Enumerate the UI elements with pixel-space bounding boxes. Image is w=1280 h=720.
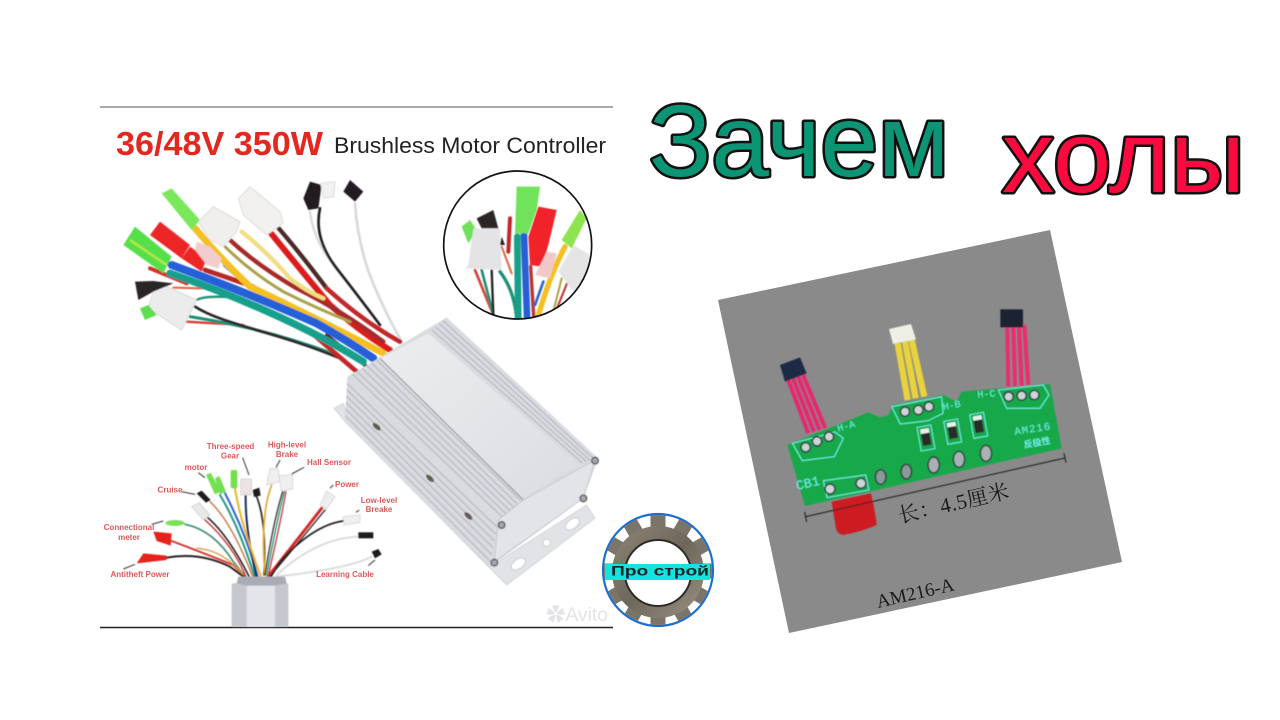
diagram labels: Connectional	[104, 523, 154, 532]
ridge lines	[345, 321, 594, 562]
diagram labels: Gear	[221, 452, 239, 460]
label leader lines	[123, 458, 375, 569]
PCB labels: AM216	[1014, 421, 1052, 439]
front end face	[494, 460, 595, 562]
badge ellipse	[603, 514, 713, 626]
PCB labels: H-A	[836, 419, 856, 435]
red capacitor	[832, 493, 877, 535]
PCB labels: H-C	[977, 388, 996, 401]
sensor B ribbon	[898, 340, 924, 400]
solder points	[801, 390, 1039, 494]
close-up red connector	[528, 207, 557, 267]
title: second word: холы	[1002, 100, 1245, 214]
gear	[604, 515, 712, 625]
red bullet connector	[150, 222, 207, 272]
black plug	[303, 182, 322, 210]
board artwork	[780, 309, 1066, 535]
close-up green connector	[515, 187, 540, 233]
diagram labels: motor	[185, 463, 207, 472]
bottom rule	[100, 626, 613, 628]
cyan band	[605, 564, 710, 580]
PCB labels: 反极性	[1023, 434, 1051, 450]
dimension line	[805, 453, 1066, 522]
mounting flange	[334, 403, 595, 585]
large white connector	[238, 187, 283, 235]
sensor B white head	[889, 324, 916, 344]
panel: controller product photo	[100, 107, 613, 628]
main wires	[170, 218, 400, 362]
panel: hall sensor board photo	[718, 230, 1122, 633]
box body	[345, 317, 598, 567]
bolts	[491, 457, 598, 566]
diagram labels	[104, 440, 397, 579]
close-up contents	[462, 187, 590, 325]
title: first word: Зачем	[649, 84, 949, 198]
small green tab	[140, 305, 157, 320]
twin green spade connectors	[123, 227, 172, 273]
mini controller block	[232, 577, 288, 627]
product name heading: Brushless Motor Controller	[334, 133, 607, 158]
dimension label: 长：4.5厘米	[896, 479, 1011, 528]
diagram labels: Low-level	[361, 496, 397, 505]
diagram wires	[167, 485, 372, 579]
diagram artwork	[123, 458, 382, 627]
inset circle border	[444, 171, 592, 319]
sensor C body	[1000, 309, 1023, 327]
sensor wires	[310, 203, 400, 338]
voltage and power heading: 36/48V 350W	[116, 125, 324, 162]
diagram labels: Learning Cable	[316, 570, 374, 579]
gear ring	[612, 526, 704, 618]
close-up right green connector	[562, 210, 587, 248]
model label: AM216-A	[874, 575, 957, 613]
diagram labels: Cruise	[158, 486, 183, 494]
close-up small green tab	[462, 220, 477, 243]
diagram labels: meter	[118, 533, 140, 542]
pink tag	[195, 242, 222, 268]
close-up right white connector	[558, 245, 590, 292]
gear teeth	[604, 515, 712, 625]
PCB labels	[795, 388, 1052, 495]
diagram labels: Antitheft Power	[110, 570, 170, 579]
small white plug	[321, 182, 335, 198]
resistors	[917, 412, 988, 451]
close-up white connector	[465, 228, 502, 270]
close-up pink tag	[535, 252, 557, 278]
sensor A body	[780, 357, 807, 382]
lower white connector	[148, 285, 197, 330]
top rule	[100, 106, 613, 108]
logo text: Про строй	[611, 562, 709, 578]
diagram labels: Breake	[366, 505, 393, 514]
diagram labels: High-level	[268, 440, 306, 450]
diagram labels: Hall Sensor	[307, 458, 351, 467]
gear hole	[625, 540, 691, 606]
wire harness	[123, 180, 400, 372]
wiring diagram	[104, 440, 397, 627]
diagram labels: Brake	[276, 450, 299, 459]
lower thin wires	[150, 268, 367, 372]
flat top panel	[380, 333, 578, 498]
black plug right	[343, 180, 363, 202]
lower black plug	[135, 281, 173, 300]
green PCB	[787, 384, 1062, 506]
PCB silkscreen pads	[792, 432, 843, 461]
inset circle: connector close-up	[444, 171, 592, 325]
diagram connectors	[137, 468, 382, 563]
PCB labels: H-B	[942, 399, 962, 413]
green spade connector	[162, 188, 200, 230]
photo heading	[116, 125, 607, 162]
grey rotated background	[718, 230, 1122, 633]
aluminium controller box	[334, 317, 598, 585]
sensor A ribbon	[788, 373, 825, 433]
logo: gear badge	[598, 511, 718, 631]
PCB labels: CB1	[795, 475, 822, 495]
close-up small black clip	[500, 237, 505, 245]
white multi-pin connector	[198, 207, 240, 247]
sensor C ribbon	[1007, 325, 1028, 387]
panel edge	[380, 358, 523, 500]
close-up black plug	[477, 210, 498, 228]
flange holes	[509, 516, 582, 572]
diagram labels: Power	[335, 480, 359, 489]
side slots	[371, 422, 474, 521]
diagram labels: Three-speed	[207, 442, 254, 451]
watermark: Avito: ✿Avito	[546, 604, 608, 626]
